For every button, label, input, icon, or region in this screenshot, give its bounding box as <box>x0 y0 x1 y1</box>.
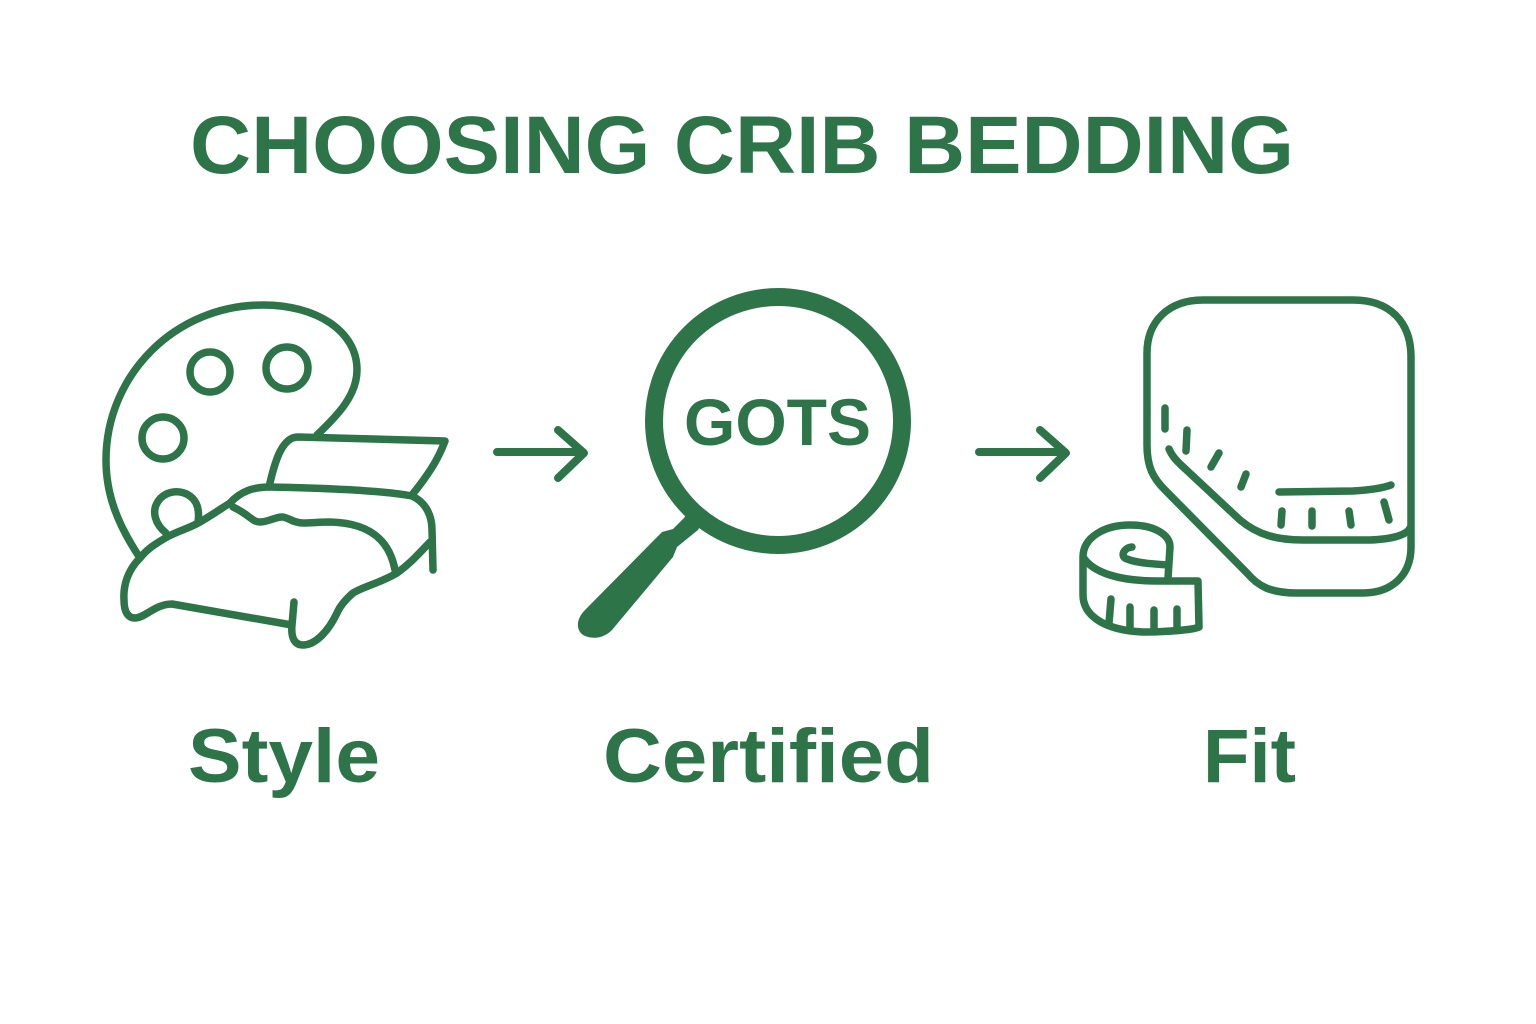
mattress outline <box>1147 300 1411 593</box>
fitted sheet ruler line <box>1279 485 1391 492</box>
label: fit: Fit <box>1203 714 1296 799</box>
lens ring <box>654 297 902 545</box>
blanket <box>124 503 430 645</box>
blanket fold <box>233 507 395 570</box>
fitted sheet edge <box>1169 449 1410 540</box>
label: certified: Certified <box>603 714 934 799</box>
title: CHOOSING CRIB BEDDING <box>190 100 1294 191</box>
folded sheet <box>269 437 445 495</box>
icon: magnifying glass <box>578 297 902 638</box>
handle <box>578 505 708 638</box>
palette paint wells <box>142 347 308 533</box>
ruler ticks <box>1165 408 1389 526</box>
lens label: GOTS <box>684 385 871 459</box>
icon: palette and bedding <box>106 305 445 645</box>
icon: crib mattress and tape measure <box>1083 300 1411 632</box>
arrow: certified to fit <box>979 430 1066 478</box>
palette outline <box>106 305 357 558</box>
label: style: Style <box>188 714 380 799</box>
arrow: style to certified <box>497 430 584 478</box>
pillow <box>230 487 433 570</box>
tape measure <box>1083 525 1199 632</box>
